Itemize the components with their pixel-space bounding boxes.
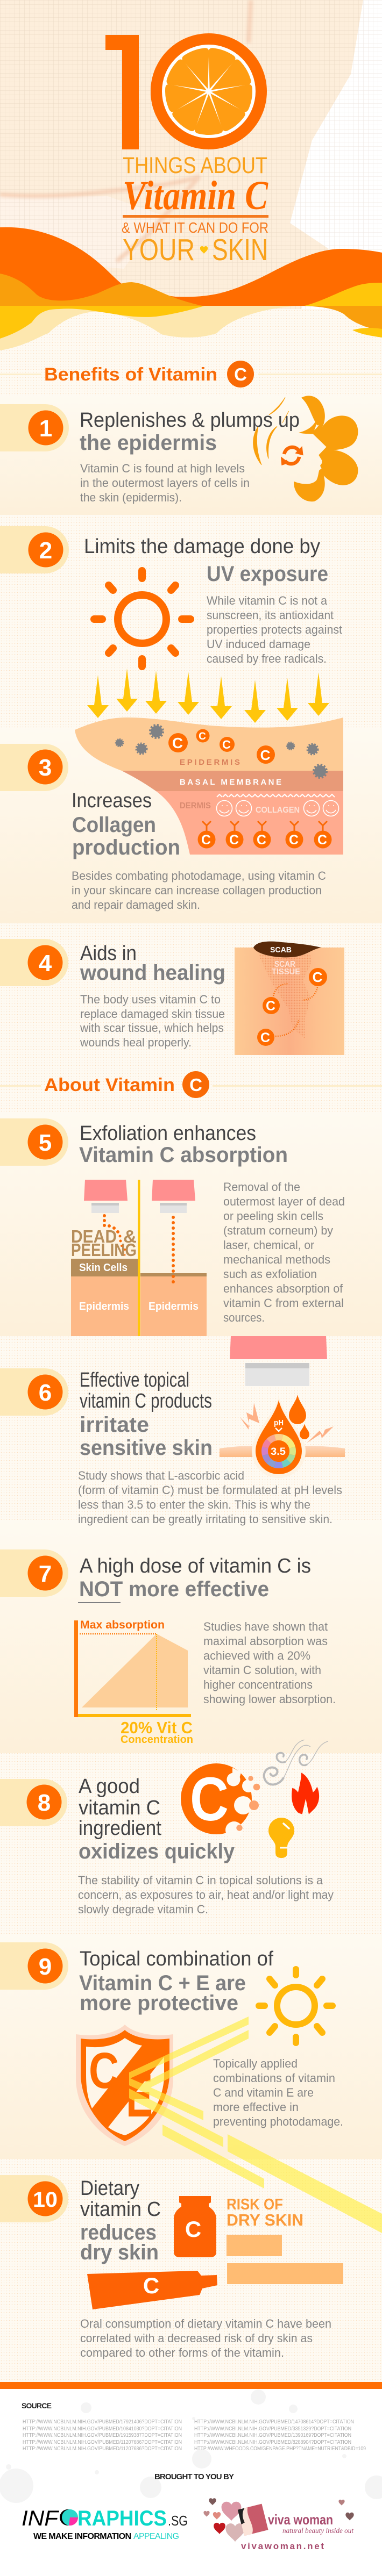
- body text 3: [72, 869, 326, 912]
- number badge 6: [0, 1368, 68, 1416]
- body text 7: [203, 1620, 336, 1706]
- section heading: benefits of vitamin C: Benefits of Vitamin: [44, 364, 217, 385]
- heading 10: Dietary: [80, 2177, 139, 2200]
- wound diagram: [235, 942, 344, 1055]
- icon: shield with C and E: [76, 2025, 173, 2146]
- title: your skin: [123, 233, 268, 267]
- label 20% vit C: 20% Vit C: [121, 1718, 193, 1737]
- section heading: about vitamin C: About Vitamin: [44, 1075, 175, 1095]
- icon: light bulb: [268, 1818, 294, 1858]
- title: 10 with orange slice: [105, 33, 267, 149]
- free radicals: [116, 726, 326, 777]
- body text 5: sources.: [223, 1311, 265, 1324]
- item 9: vitamin C + E: [0, 1942, 382, 2233]
- label basal membrane: BASAL MEMBRANE: [180, 778, 281, 787]
- heading 6: Effective topical: [80, 1369, 189, 1391]
- number badge 3: [0, 744, 68, 791]
- vitamin C molecules in dermis: C: [229, 833, 239, 848]
- body text 2: UV induced damage: [207, 637, 310, 651]
- heading 2: Limits the damage done by: [84, 535, 320, 558]
- body text 2: While vitamin C is not a: [207, 594, 327, 607]
- icon: cream tube: C: [143, 2273, 159, 2298]
- item 6: irritate sensitive skin: [0, 1336, 345, 1526]
- pump head: [230, 1336, 327, 1386]
- vitamin C molecules in dermis: C: [201, 833, 211, 848]
- right skin column: [140, 1273, 207, 1336]
- icon: flame: [292, 1773, 319, 1814]
- heading 7: A high dose of vitamin C is: [80, 1555, 311, 1577]
- body text 4: with scar tissue, which helps: [80, 1021, 224, 1035]
- source heading: SOURCE: [22, 2401, 52, 2410]
- section heading: benefits of vitamin C: [0, 361, 382, 388]
- source links right: [194, 2419, 366, 2452]
- title rule: [123, 215, 268, 218]
- number badge 8: 8: [38, 1790, 51, 1816]
- absorbed dots: [172, 1216, 175, 1283]
- body text 2: caused by free radicals.: [207, 652, 327, 665]
- title: Vitamin C: Vitamin C: [123, 173, 268, 218]
- body text 4: wounds heal properly.: [80, 1036, 192, 1049]
- body text 9: Topically applied: [213, 2057, 298, 2070]
- heading 6: irritate: [80, 1413, 149, 1437]
- heading 9: Topical combination of: [80, 1948, 273, 1970]
- heading 5: Vitamin C absorption: [79, 1143, 288, 1167]
- source links right: HTTP://WWW.NCBI.NLM.NIH.GOV/PUBMED/3351329?DOPT=CITATION: [194, 2426, 351, 2432]
- title: what it can do for: & WHAT IT CAN DO FOR: [122, 219, 268, 236]
- scab: [253, 942, 321, 957]
- label scar tissue: SCAR: [274, 960, 295, 969]
- number badge 2: [0, 526, 69, 573]
- body text 7: showing lower absorption.: [203, 1692, 336, 1706]
- heading 6: sensitive skin: [80, 1436, 213, 1460]
- heading 5: Exfoliation enhances: [80, 1122, 256, 1145]
- body text 1: Vitamin C is found at high levels: [80, 462, 245, 475]
- body text 4: replace damaged skin tissue: [80, 1007, 225, 1021]
- heading 4: [80, 942, 225, 985]
- icon: air swirls: [264, 1740, 328, 1784]
- item 1: replenishes the epidermis: [0, 396, 358, 504]
- section heading: benefits of vitamin C: C: [234, 364, 247, 384]
- logo: infographics.sg: .SG: [168, 2513, 188, 2529]
- number badge 10: 10: [33, 2188, 58, 2212]
- vitamin C molecules: C: [260, 1030, 270, 1045]
- body text 1: the skin (epidermis).: [80, 491, 182, 504]
- risk of dry skin bars: DRY SKIN: [227, 2211, 303, 2229]
- footer background with splatters: [0, 2382, 382, 2576]
- body text 7: Studies have shown that: [203, 1620, 328, 1633]
- drop: [252, 1396, 306, 1478]
- absorption chart: [74, 1619, 193, 1746]
- panel backgrounds: [0, 396, 382, 2159]
- body text 5: (stratum corneum) by: [223, 1224, 334, 1237]
- pH drop illustration: [220, 1336, 345, 1478]
- body text 9: more effective in: [213, 2100, 299, 2114]
- title: your skin: SKIN: [212, 233, 268, 267]
- icon: renew arrows: [281, 446, 303, 465]
- heading 6: [80, 1369, 213, 1460]
- label epidermis: EPIDERMIS: [180, 758, 240, 767]
- body text 6: ingredient can be greatly irritating to sensitive skin.: [78, 1512, 333, 1526]
- letter C: C: [89, 2042, 119, 2099]
- heading 8: ingredient: [79, 1817, 161, 1840]
- number badge 3: 3: [39, 755, 52, 781]
- item 3: collagen diagram and text: [0, 669, 343, 912]
- body text 6: Study shows that L-ascorbic acid: [78, 1469, 244, 1482]
- logo: infographics.sg: RAPHICS: [77, 2507, 167, 2530]
- title: 10 with orange slice: 10: [102, 9, 264, 183]
- divider: [138, 1180, 140, 1336]
- hearts: [203, 2498, 354, 2542]
- label dermis: DERMIS: [180, 801, 211, 810]
- lightning: [240, 1403, 334, 1443]
- body text 6: [78, 1469, 342, 1526]
- item 2: UV damage: [0, 526, 343, 666]
- heading 8: A good: [79, 1775, 140, 1798]
- logo: viva woman: [203, 2498, 354, 2551]
- body text 5: mechanical methods: [223, 1253, 330, 1266]
- vitamin C molecules in dermis: C: [257, 833, 266, 848]
- heading 6: vitamin C products: [80, 1390, 212, 1412]
- heading 1: Replenishes & plumps up: [80, 409, 300, 432]
- body text 10: compared to other forms of the vitamin.: [80, 2346, 284, 2359]
- brought to you by: BROUGHT TO YOU BY: [154, 2472, 234, 2481]
- risk of dry skin bars: [227, 2196, 343, 2284]
- exfoliation diagram: [71, 1180, 207, 1336]
- heading 10: [80, 2177, 161, 2264]
- left bottle: [84, 1180, 128, 1213]
- item 4: wound healing: [0, 939, 344, 1055]
- logo: infographics.sg: [22, 2507, 188, 2541]
- tagline: natural beauty inside out: [282, 2527, 354, 2535]
- heading 1: [80, 409, 300, 455]
- item 5: exfoliation: [0, 1118, 345, 1336]
- source links left: HTTP://WWW.NCBI.NLM.NIH.GOV/PUBMED/19159387?DOPT=CITATION: [23, 2433, 182, 2438]
- heading 9: more protective: [80, 1991, 238, 2015]
- chevron: [275, 1428, 282, 1431]
- heading 2: UV exposure: [207, 562, 328, 586]
- skin layers diagram: C: [199, 731, 206, 742]
- title: your skin: YOUR: [123, 233, 195, 267]
- skin layers diagram: [75, 717, 343, 855]
- label concentration: Concentration: [121, 1734, 193, 1746]
- skin layers diagram: C: [172, 735, 183, 751]
- number badge 7: 7: [39, 1561, 52, 1587]
- number badge 4: 4: [39, 950, 52, 977]
- body text 7: maximal absorption was: [203, 1634, 328, 1648]
- number badge 7: [0, 1549, 68, 1597]
- label pH: pH: [274, 1418, 284, 1427]
- pH colour wheel: [261, 1434, 296, 1468]
- body text 6: less than 3.5 to enter the skin. This is why the: [78, 1498, 310, 1511]
- body text 8: The stability of vitamin C in topical solutions is a: [78, 1874, 323, 1887]
- risk of dry skin bars: RISK OF: [227, 2196, 283, 2213]
- heading 7: [78, 1555, 311, 1603]
- icon: cream tube: [87, 2271, 217, 2309]
- body text 5: outermost layer of dead: [223, 1195, 345, 1208]
- logo: infographics.sg: INF: [22, 2507, 60, 2530]
- vitamin C molecules: C: [313, 969, 323, 985]
- source links left: [23, 2419, 182, 2452]
- vitamin C molecules: [257, 968, 327, 1046]
- vitamin C molecules in dermis: C: [317, 833, 327, 848]
- heading 8: oxidizes quickly: [79, 1840, 235, 1863]
- blocked dots: [103, 1214, 126, 1255]
- label 3.5: 3.5: [271, 1446, 286, 1458]
- item 10: dry skin: [0, 2175, 343, 2359]
- logo: infographics.sg: APPEALING: [133, 2532, 179, 2541]
- vitamin C molecules: C: [266, 999, 275, 1014]
- left skin column: PEELING: [71, 1240, 137, 1260]
- source links left: HTTP://WWW.NCBI.NLM.NIH.GOV/PUBMED/11207686?DOPT=CITATION: [23, 2446, 182, 2452]
- body text 3: in your skincare can increase collagen production: [72, 884, 322, 897]
- number badge 2: 2: [39, 537, 52, 564]
- left skin column: Skin Cells: [79, 1262, 128, 1274]
- body text 5: laser, chemical, or: [223, 1238, 314, 1252]
- body text 3: and repair damaged skin.: [72, 898, 200, 912]
- body text 7: higher concentrations: [203, 1678, 313, 1691]
- number badge 5: 5: [39, 1130, 52, 1156]
- section heading: about vitamin C: [0, 1071, 382, 1098]
- body text 2: [207, 594, 343, 665]
- body text 5: such as exfoliation: [223, 1267, 317, 1281]
- heading 10: dry skin: [80, 2241, 159, 2264]
- body text 10: correlated with a decreased risk of dry skin as: [80, 2331, 313, 2345]
- icon: face with flower hair: [253, 396, 358, 501]
- label max absorption: Max absorption: [80, 1619, 165, 1631]
- heading 3: [72, 790, 180, 859]
- web address: vivawoman.net: [241, 2541, 324, 2551]
- icon: oxidising C: C: [190, 1765, 229, 1834]
- header waves: [0, 227, 382, 350]
- body text 8: [78, 1874, 334, 1916]
- heading 10: reduces: [80, 2221, 157, 2244]
- heading 3: production: [72, 836, 180, 859]
- left skin column: DEAD: [71, 1226, 117, 1246]
- body text 5: enhances absorption of: [223, 1282, 343, 1295]
- source links left: HTTP://WWW.NCBI.NLM.NIH.GOV/PUBMED/17921406?DOPT=CITATION: [23, 2419, 182, 2425]
- body text 1: in the outermost layers of cells in: [80, 476, 250, 490]
- header skin photo background: [0, 0, 382, 309]
- skin layers diagram: C: [222, 738, 231, 751]
- scar tissue hatching: [258, 954, 311, 1039]
- number badge 1: 1: [39, 415, 52, 442]
- icon: supplement bottle: [174, 2196, 216, 2257]
- heading 5: [79, 1122, 288, 1167]
- body text 9: [213, 2057, 343, 2128]
- body text 5: [223, 1180, 345, 1324]
- body text 8: concern, as exposures to air, heat and/or light may: [78, 1888, 334, 1901]
- UV arrows: [87, 669, 329, 723]
- item 8: oxidizes quickly: [0, 1740, 334, 1916]
- icon: sun: [259, 1969, 333, 2043]
- UV beams reflecting off shield: [129, 2017, 382, 2233]
- skin: [220, 1446, 345, 1457]
- number badge 5: [0, 1118, 68, 1166]
- body text 8: slowly degrade vitamin C.: [78, 1903, 208, 1916]
- footer orange bar: [0, 2382, 382, 2389]
- collagen smiley cells: [216, 801, 339, 816]
- item 7: high dose not more effective: [0, 1549, 336, 1746]
- label scar tissue: TISSUE: [272, 967, 300, 977]
- heading 4: Aids in: [80, 942, 137, 965]
- body text 4: The body uses vitamin C to: [80, 993, 221, 1006]
- body text 5: Removal of the: [223, 1180, 300, 1194]
- skin layers diagram: C: [260, 747, 271, 763]
- number badge 9: 9: [39, 1954, 52, 1980]
- small drops: [289, 1395, 306, 1424]
- title: things about: THINGS ABOUT: [123, 153, 267, 178]
- source links left: HTTP://WWW.NCBI.NLM.NIH.GOV/PUBMED/10841030?DOPT=CITATION: [23, 2426, 182, 2432]
- number badge 9: [0, 1942, 68, 1990]
- body text 7: vitamin C solution, with: [203, 1663, 321, 1677]
- body text 2: sunscreen, its antioxidant: [207, 608, 334, 622]
- heading 8: [79, 1775, 235, 1863]
- heading 10: vitamin C: [80, 2198, 161, 2221]
- vitamin C molecules in dermis: C: [289, 833, 299, 848]
- label scar tissue: [272, 960, 300, 977]
- number badge 1: [0, 404, 69, 451]
- logo: infographics.sg: WE MAKE INFORMATION: [33, 2532, 131, 2541]
- left skin column: [71, 1226, 138, 1336]
- body text 5: vitamin C from external: [223, 1296, 344, 1310]
- body text 7: achieved with a 20%: [203, 1649, 310, 1662]
- heading 3: Collagen: [72, 813, 156, 837]
- dotted paths: [273, 984, 317, 1036]
- body text 4: [80, 993, 225, 1049]
- heading 1: the epidermis: [80, 431, 217, 455]
- number badge 8: [0, 1779, 67, 1826]
- label scab: SCAB: [270, 945, 292, 955]
- body text 9: preventing photodamage.: [213, 2115, 343, 2128]
- heading 9: [79, 1948, 273, 2015]
- left skin column: Epidermis: [79, 1301, 129, 1312]
- source links left: HTTP://WWW.NCBI.NLM.NIH.GOV/PUBMED/11207686?DOPT=CITATION: [23, 2439, 182, 2445]
- icon: supplement bottle: C: [185, 2216, 201, 2242]
- body text 9: combinations of vitamin: [213, 2071, 335, 2085]
- number badge 10: [0, 2175, 68, 2222]
- source links right: HTTP://WWW.NCBI.NLM.NIH.GOV/PUBMED/1390169?DOPT=CITATION: [194, 2433, 351, 2438]
- source links right: HTTP://WWW.NCBI.NLM.NIH.GOV/PUBMED/8288904?DOPT=CITATION: [194, 2439, 351, 2445]
- body text 10: [80, 2317, 331, 2359]
- right bottle: [152, 1180, 195, 1213]
- heading 2: [84, 535, 328, 586]
- section heading: about vitamin C: C: [189, 1075, 202, 1095]
- body text 10: Oral consumption of dietary vitamin C have been: [80, 2317, 331, 2330]
- letter E: E: [126, 2062, 153, 2129]
- body text 2: properties protects against: [207, 623, 343, 636]
- wordmark: viva woman: [268, 2512, 333, 2528]
- source links right: HTTP://WWW.NCBI.NLM.NIH.GOV/PUBMED/14708614?DOPT=CITATION: [194, 2419, 354, 2425]
- heading 3: Increases: [72, 790, 152, 812]
- number badge 4: [0, 939, 68, 986]
- number badge 6: 6: [39, 1380, 52, 1406]
- label collagen: COLLAGEN: [256, 806, 300, 815]
- heading 4: wound healing: [80, 961, 225, 985]
- heading 7: NOT more effective: [79, 1577, 269, 1601]
- body text 1: [80, 462, 250, 504]
- collagen ridge marks: [217, 794, 335, 797]
- left skin column: &: [123, 1226, 137, 1246]
- body text 3: Besides combating photodamage, using vitamin C: [72, 869, 326, 882]
- portrait: [238, 2504, 268, 2536]
- body text 9: C and vitamin E are: [213, 2086, 314, 2099]
- body text 6: (form of vitamin C) must be formulated at pH levels: [78, 1483, 342, 1497]
- body text 5: or peeling skin cells: [223, 1209, 323, 1223]
- right skin column: Epidermis: [148, 1301, 199, 1312]
- vitamin C molecules in epidermis: [168, 729, 275, 764]
- vitamin C molecules in dermis: [198, 821, 331, 848]
- heading 9: Vitamin C + E are: [79, 1971, 246, 1995]
- icon: sun: [94, 571, 190, 666]
- icon: oxidising C: [181, 1763, 260, 1839]
- heading 8: vitamin C: [79, 1797, 160, 1819]
